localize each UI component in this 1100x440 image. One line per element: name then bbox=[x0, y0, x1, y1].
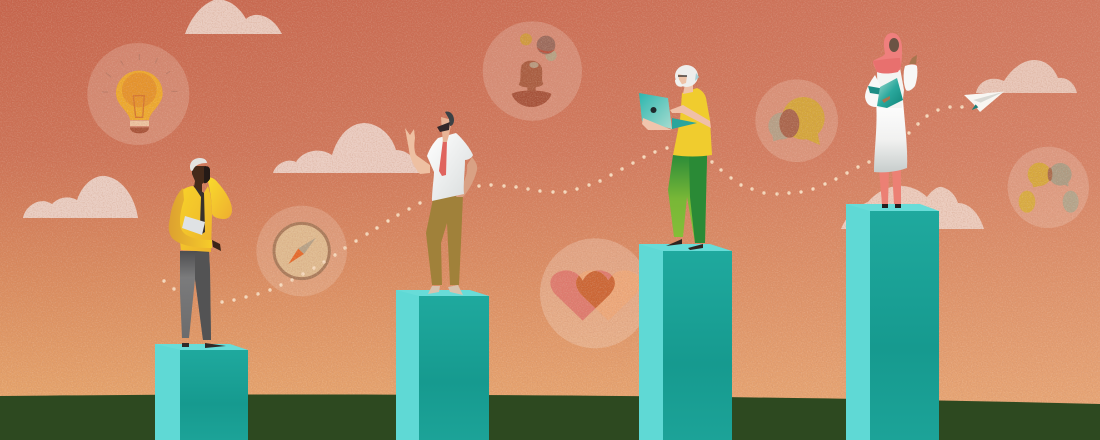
figure 3: older woman with laptop bbox=[639, 65, 712, 250]
bar 4 bbox=[846, 204, 939, 440]
bar 2 bbox=[396, 290, 489, 440]
cloud: upper right bbox=[976, 60, 1077, 93]
figure 2: bearded man in white shirt and tie bbox=[405, 112, 477, 295]
icon: overlapping hearts in circle bbox=[540, 238, 650, 348]
icon: light bulb in circle bbox=[87, 43, 189, 145]
cloud: left bbox=[23, 176, 138, 218]
bar 3 bbox=[639, 244, 732, 440]
cloud: behind fourth figure bbox=[841, 186, 984, 229]
cloud: middle bbox=[273, 123, 421, 173]
dotted path bbox=[162, 105, 964, 304]
icon: speech bubbles in circle bbox=[755, 79, 838, 162]
icon: group conversation in circle bbox=[1008, 147, 1089, 228]
icon: paper airplane bbox=[964, 92, 1004, 112]
figure 1: man on phone in yellow jacket bbox=[169, 158, 232, 348]
bar 1 bbox=[155, 344, 248, 440]
ground: dark green hill bbox=[0, 395, 1100, 440]
cloud: top bbox=[185, 0, 282, 34]
icon: person with thought bubbles in circle bbox=[483, 21, 582, 121]
figure 4: woman in hijab holding a book bbox=[865, 33, 917, 208]
icon: compass in circle bbox=[256, 206, 347, 296]
